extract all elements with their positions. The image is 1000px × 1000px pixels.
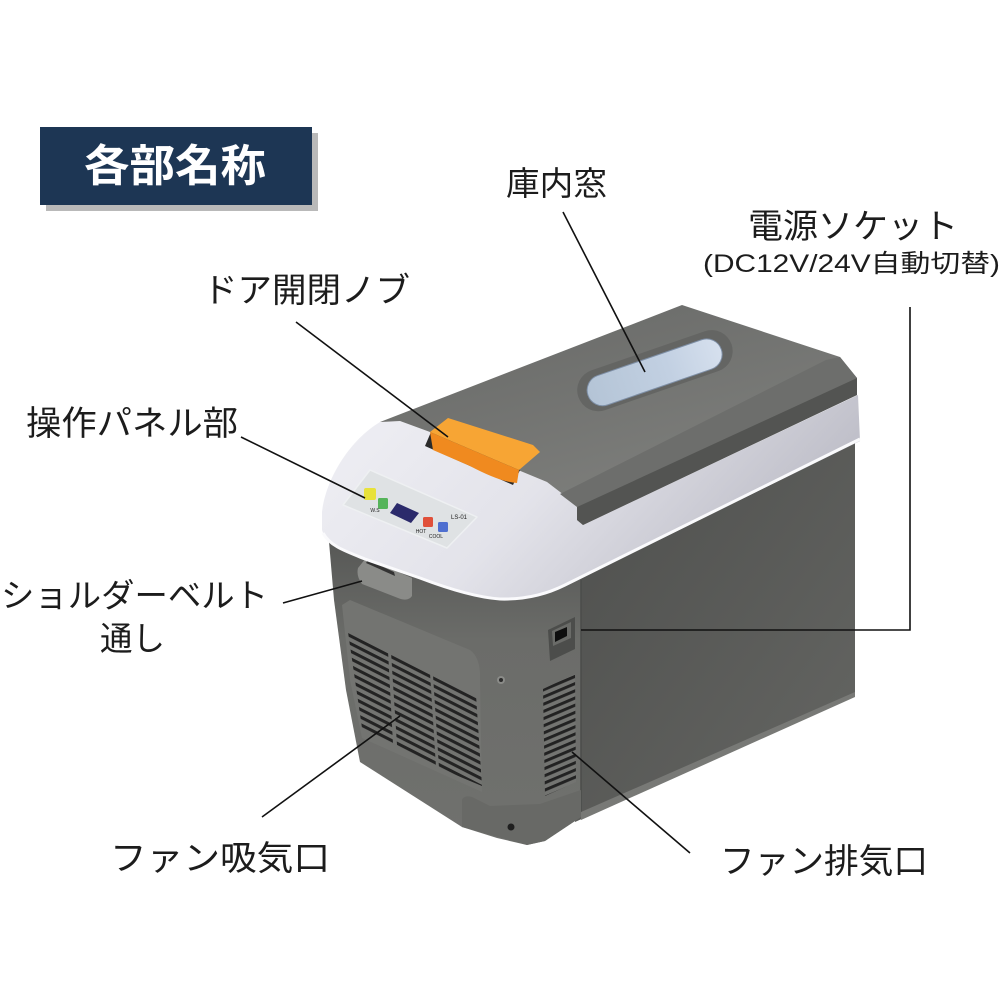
side exhaust vents — [543, 674, 576, 796]
hot button — [423, 517, 433, 527]
power button — [364, 488, 376, 500]
leader lines — [241, 212, 910, 853]
front vent cover — [342, 600, 482, 792]
title: 各部名称 — [84, 142, 266, 191]
panel small labels — [370, 508, 468, 540]
label: fan exhaust: ファン排気口 — [720, 843, 928, 881]
interior window — [572, 324, 738, 417]
product: portable cooler — [322, 305, 860, 845]
label: shoulder belt second line: 通し — [100, 620, 165, 657]
panel small labels: W.S — [370, 508, 380, 514]
lid — [380, 305, 857, 525]
label: interior window: 庫内窓 — [506, 165, 607, 202]
panel small labels: LS-01 — [451, 515, 468, 521]
cooler side body — [575, 432, 855, 822]
label: door knob: ドア開閉ノブ — [203, 272, 410, 310]
white collar — [322, 395, 860, 600]
label: control panel: 操作パネル部 — [26, 405, 238, 443]
label: shoulder belt: ショルダーベルト — [1, 577, 268, 614]
panel small labels: HOT — [416, 529, 426, 535]
title — [40, 127, 318, 211]
label: fan intake: ファン吸気口 — [110, 840, 330, 878]
mode button — [378, 498, 388, 509]
screws — [497, 676, 514, 830]
label: auto voltage switching: (DC12V/24V自動切替) — [703, 250, 1000, 278]
display — [390, 503, 419, 523]
base ledge — [462, 790, 581, 845]
control panel — [343, 470, 477, 548]
shoulder belt slot — [358, 558, 412, 600]
cooler front body — [328, 530, 581, 845]
label: power socket: 電源ソケット — [748, 208, 958, 246]
front intake vents — [348, 632, 482, 786]
panel small labels: COOL — [429, 534, 443, 540]
power socket — [548, 617, 575, 661]
door knob — [425, 418, 540, 485]
cool button — [438, 522, 448, 532]
